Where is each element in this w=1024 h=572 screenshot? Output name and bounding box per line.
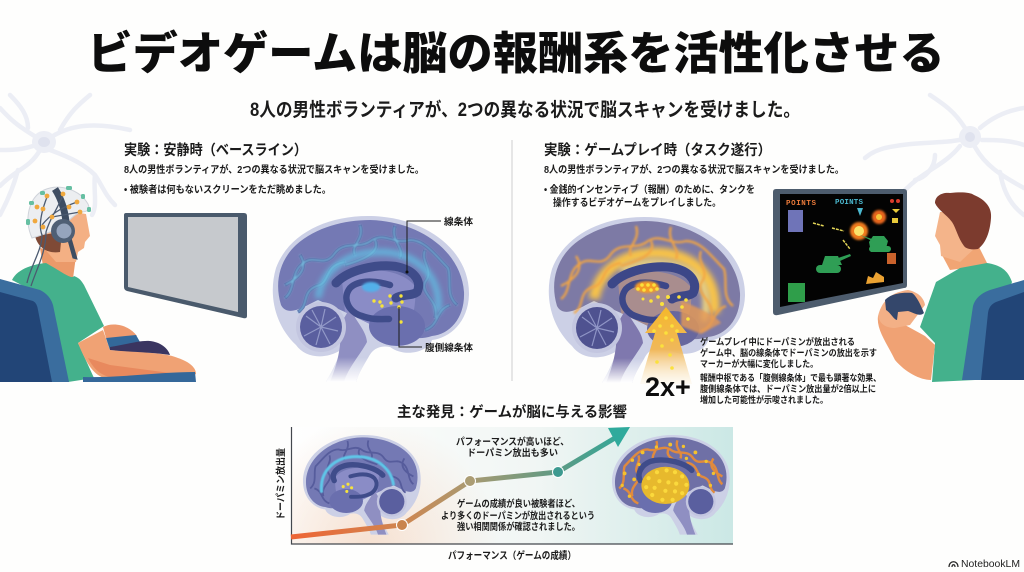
data point low [396, 520, 408, 530]
chart note: performance and dopamine: ドーパミン放出も多い [467, 447, 558, 459]
brain: gameplay [549, 217, 745, 383]
illustration: person with EEG cap [0, 186, 196, 382]
callout: gameplay results: マーカーが大幅に変化しました。 [700, 358, 818, 369]
callout: gameplay results: 報酬中枢である「腹側線条体」で最も顕著な効果、 [700, 372, 881, 383]
lower lobe [369, 306, 425, 346]
neck [40, 248, 76, 286]
panel: baseline experiment [0, 141, 473, 382]
panel: key finding [275, 403, 733, 562]
bullet: gameplay task: 操作するビデオゲームをプレイしました。 [553, 196, 721, 209]
label: ventral striatum: 腹側線条体 [425, 342, 473, 354]
heading: gameplay: 実験：ゲームプレイ時（タスク遂行） [544, 141, 771, 159]
corpus callosum [336, 266, 419, 298]
tank [860, 235, 891, 252]
watermark: NotebookLM: NotebookLM [961, 559, 1020, 570]
blue glow [362, 282, 380, 292]
text: gameplay description: 8人の男性ボランティアが、2つの異なる状況で脳スキャンを受けました。 [544, 163, 844, 176]
chart note: correlation: より多くのドーパミンが放出されるという [441, 510, 595, 522]
callout: gameplay results: 増加した可能性が示唆されました。 [700, 394, 828, 405]
shirt [920, 263, 1012, 382]
callout: gameplay results [700, 336, 881, 405]
hair [935, 192, 991, 249]
label: striatum [406, 216, 473, 274]
heading: key finding: 主な発見：ゲームが脳に与える影響 [397, 403, 627, 421]
brainstem [330, 308, 367, 382]
data point high [552, 466, 564, 478]
armrest [106, 335, 140, 350]
electrodes [33, 192, 82, 229]
illustration: game monitor: POINTS [786, 200, 816, 208]
tank [816, 254, 851, 273]
controller [885, 293, 924, 320]
chart note: correlation [441, 498, 595, 533]
data point mid [464, 476, 476, 486]
face [42, 208, 90, 262]
callout: gameplay results: ゲーム中、脳の線条体でドーパミンの放出を示す [700, 347, 877, 358]
EEG cap [28, 187, 89, 238]
chart note: correlation: 強い相関関係が確認されました。 [457, 521, 580, 533]
divider between experiments [511, 140, 513, 381]
y axis label: ドーパミン放出量 [275, 448, 287, 520]
illustration: person with controller [878, 192, 1024, 382]
x axis label: パフォーマンス（ゲームの成績） [448, 549, 576, 562]
arm [878, 316, 935, 380]
trend line [291, 427, 630, 537]
face [935, 212, 975, 262]
chart note: performance and dopamine: パフォーマンスが高いほど、 [456, 436, 569, 448]
brain: baseline [273, 216, 469, 382]
shirt [12, 263, 104, 382]
label: ventral striatum [399, 307, 473, 354]
lower lobe [647, 311, 699, 347]
chair back [0, 279, 69, 382]
chart note: performance and dopamine [456, 436, 569, 459]
arrow: dopamine increase [640, 307, 692, 384]
cerebellum [296, 302, 346, 352]
label: 2x+: 2x+ [645, 372, 691, 402]
cerebellum [572, 303, 622, 353]
illustration: blank monitor [124, 213, 247, 318]
bullet: baseline task: • 被験者は何もないスクリーンをただ眺めました。 [124, 183, 331, 196]
brainstem [606, 309, 643, 383]
illustration: game monitor: POINTS [835, 199, 863, 207]
chair seat [83, 372, 196, 382]
hand [103, 324, 137, 340]
bullet: gameplay task [544, 183, 755, 209]
brain: low dopamine [303, 435, 421, 535]
electrode wires [27, 195, 80, 286]
title: ビデオゲームは脳の報酬系を活性化させる [88, 28, 944, 79]
illustration: game monitor [773, 189, 907, 315]
corpus callosum [612, 267, 695, 299]
game sprites [788, 210, 803, 232]
dopamine dots [636, 283, 690, 321]
heading: baseline: 実験：安静時（ベースライン） [124, 141, 307, 159]
inner region [342, 270, 415, 334]
neuron decoration right [865, 95, 1024, 215]
bullet: gameplay task: • 金銭的インセンティブ（報酬）のために、タンクを [544, 183, 755, 196]
subtitle: 8人の男性ボランティアが、2つの異なる状況で脳スキャンを受けました。 [250, 98, 800, 121]
arrowhead [608, 427, 630, 447]
nape hair [35, 232, 62, 252]
chair back [962, 280, 1024, 380]
chart note: correlation: ゲームの成績が良い被験者ほど、 [457, 498, 580, 510]
label: striatum: 線条体 [444, 216, 473, 228]
neuron decoration left [0, 95, 130, 215]
hand [878, 290, 925, 328]
text: baseline description: 8人の男性ボランティアが、2つの異なる状況で脳スキャンを受けました。 [124, 163, 424, 176]
callout: gameplay results: 腹側線条体では、ドーパミン放出量が2倍以上に [700, 383, 876, 394]
brain: high dopamine [612, 435, 730, 535]
axes [292, 427, 733, 544]
arm [78, 330, 196, 378]
panel: gameplay experiment [544, 141, 1024, 405]
neck [942, 235, 988, 270]
callout: gameplay results: ゲームプレイ中にドーパミンが放出される [700, 336, 855, 347]
chart: dopamine vs performance [275, 427, 733, 562]
inner region [618, 271, 691, 335]
headset [68, 238, 77, 259]
dopamine dots [372, 294, 404, 324]
orange glow [635, 281, 659, 293]
